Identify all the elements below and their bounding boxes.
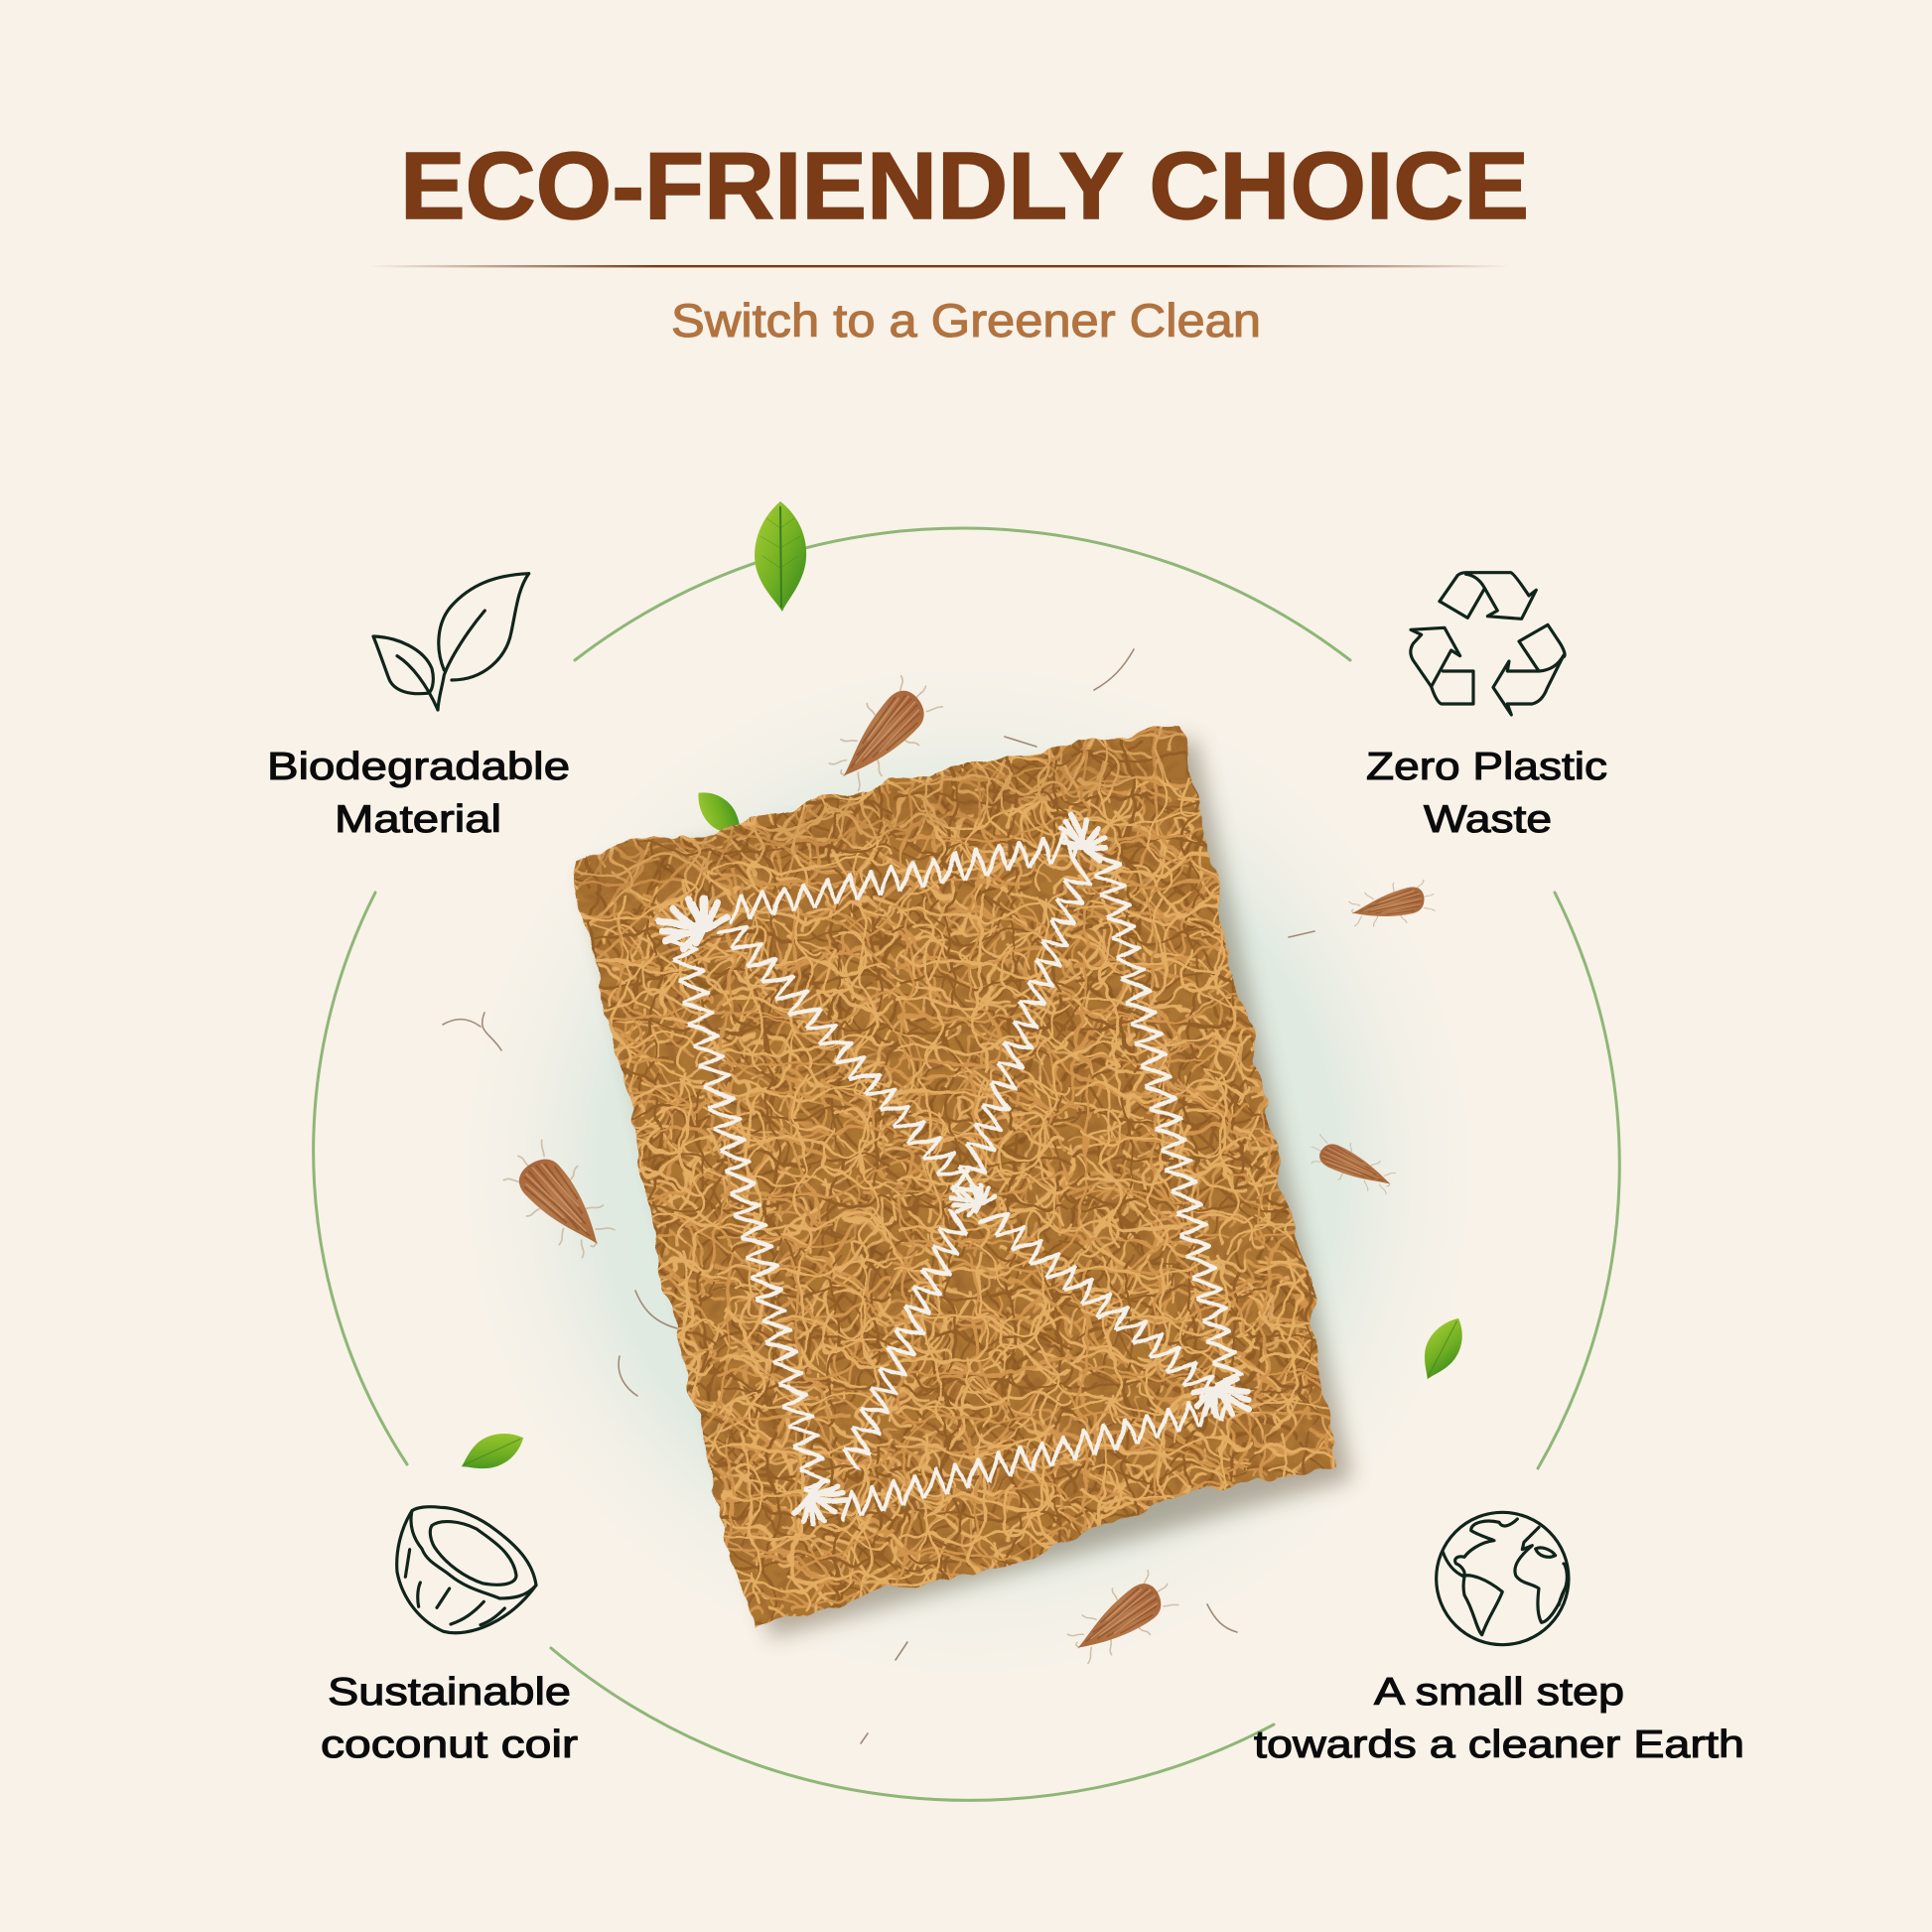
panel: cleaner earth bbox=[1254, 1512, 1744, 1766]
panel: biodegradable material bbox=[267, 574, 570, 841]
coir husk 4 bbox=[494, 1131, 623, 1269]
panel: zero plastic waste bbox=[1366, 573, 1607, 841]
panel: biodegradable material: Material bbox=[335, 798, 501, 841]
coir husk 1 bbox=[817, 666, 952, 799]
loose fibres bbox=[443, 649, 1314, 1743]
icon: leaves bbox=[373, 574, 529, 710]
coir husk 3 bbox=[1304, 1128, 1400, 1202]
panel: zero plastic waste: Waste bbox=[1424, 798, 1552, 841]
panel: cleaner earth: towards a cleaner Earth bbox=[1254, 1724, 1744, 1766]
leaf: right bbox=[1413, 1311, 1472, 1386]
panel: sustainable coconut coir bbox=[321, 1507, 578, 1766]
subtitle: Switch to a Greener Clean bbox=[671, 294, 1261, 346]
icon: coconut bbox=[397, 1507, 536, 1633]
icon: recycle bbox=[1411, 573, 1565, 715]
circular arc ring bbox=[314, 528, 1619, 1800]
label: Sustainable bbox=[328, 1671, 571, 1714]
label: Biodegradable bbox=[267, 746, 570, 788]
leaf: lower left bbox=[455, 1424, 530, 1479]
sponge shadow bbox=[586, 739, 1352, 1638]
label: A small step bbox=[1374, 1671, 1624, 1714]
panel: sustainable coconut coir: coconut coir bbox=[321, 1724, 578, 1766]
icon: globe bbox=[1437, 1512, 1569, 1645]
coconut coir sponge bbox=[375, 572, 1571, 1647]
leaf: on top of ring bbox=[755, 501, 806, 612]
title: ECO-FRIENDLY CHOICE bbox=[400, 133, 1529, 239]
label: Zero Plastic bbox=[1366, 746, 1607, 788]
zigzag stitching bbox=[658, 805, 1257, 1528]
background glow bbox=[442, 645, 1494, 1698]
coir husk 2 bbox=[1347, 877, 1438, 932]
coir husk 5 bbox=[1059, 1563, 1185, 1672]
leaf: behind sponge bbox=[689, 782, 752, 846]
